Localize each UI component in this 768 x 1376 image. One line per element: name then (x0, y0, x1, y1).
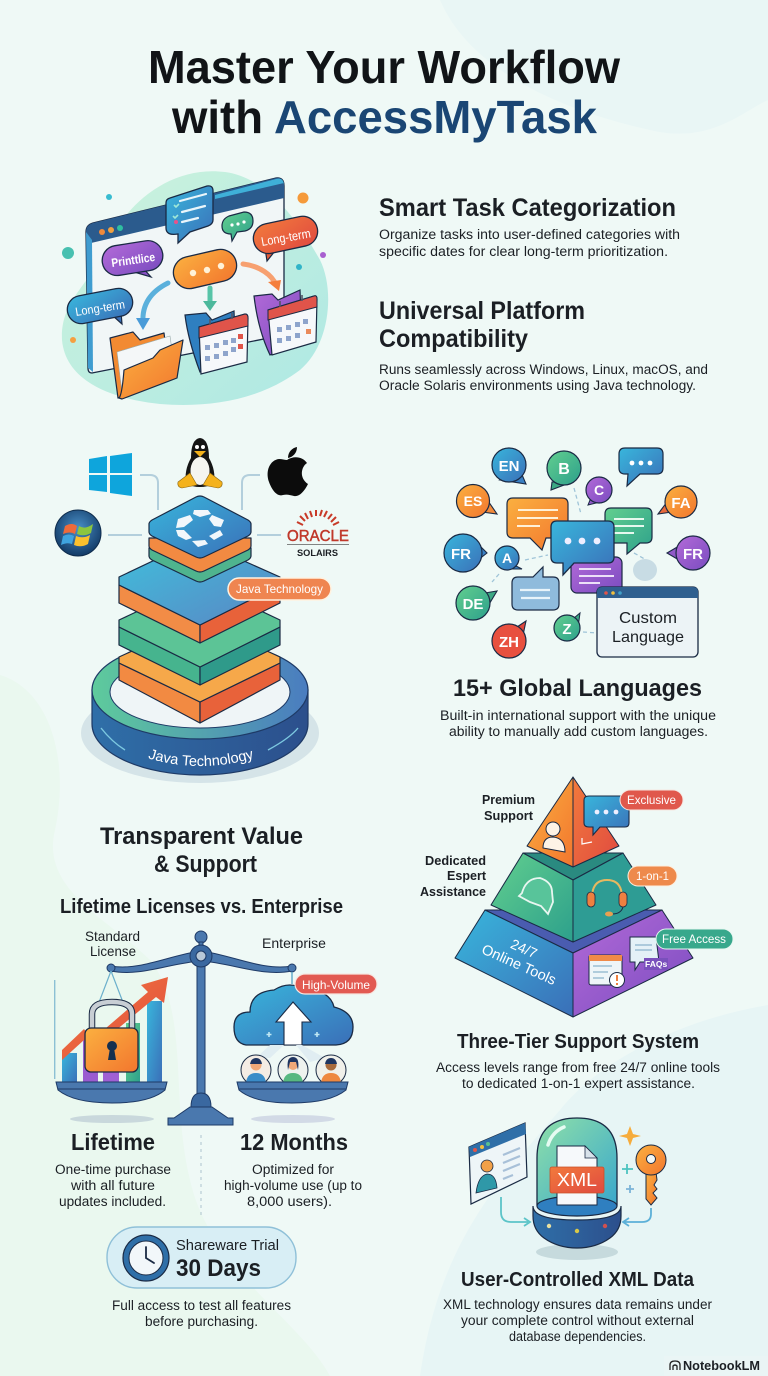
text: online tools: Online Tools (479, 942, 558, 989)
icon: apple (268, 447, 308, 496)
icon: check mark (582, 838, 592, 844)
bubble: ZH: ZH (499, 634, 519, 651)
text block: universal platform compatibility: Compatibility (379, 325, 528, 353)
window (86, 178, 284, 373)
bubble: long-term blue: Long-term (74, 297, 126, 319)
bubble: green (222, 212, 253, 241)
text block: universal platform compatibility: Runs seamlessly across Windows, Linux, macOS, and (379, 362, 708, 377)
title: with AccessMyTask (171, 91, 597, 143)
illustration: language bubbles (444, 448, 710, 658)
text block: smart task categorization: specific dates for clear long-term prioritization. (379, 244, 668, 259)
icon: calendar with blue folder (185, 311, 248, 374)
illustration: task categorization (62, 171, 328, 405)
pyramid middle tier (491, 853, 656, 942)
base platform: Java Technology (148, 749, 252, 766)
column: lifetime (55, 1129, 171, 1209)
pill: high-volume: High-Volume (302, 978, 370, 992)
scale labels (85, 928, 326, 959)
bubble: EN: EN (499, 458, 519, 475)
bubble: Z: Z (562, 621, 572, 638)
text block: user-controlled xml (443, 1269, 713, 1344)
label: dedicated expert assistance: Assistance (420, 884, 486, 899)
column: 12 months (224, 1129, 362, 1209)
pill: 1-on-1: 1-on-1 (636, 869, 669, 883)
window: custom language: Language (612, 629, 684, 646)
bubble: ZH (492, 621, 526, 658)
icon: faq note (630, 937, 668, 970)
icon: faq note: FAQs (645, 959, 667, 969)
pill: free access (656, 929, 733, 949)
illustration: support pyramid (420, 777, 733, 1017)
label: premium support: Support (484, 808, 534, 823)
bubble: long-term red: Long-term (260, 226, 312, 249)
heading: transparent value: Transparent Value (100, 823, 303, 850)
column: 12 months: 12 Months (240, 1129, 348, 1155)
scale labels: Enterprise (262, 935, 326, 951)
icon: windows orb (55, 510, 101, 556)
bubble: Z (554, 613, 580, 641)
text block: three-tier support: Three-Tier Support System (457, 1031, 699, 1053)
chat: green (605, 508, 652, 554)
text block: user-controlled xml: database dependencies. (509, 1329, 646, 1344)
connector arrows (501, 1164, 651, 1226)
bubble: printtlice: Printtlice (110, 250, 156, 270)
text block: three-tier support: to dedicated 1-on-1 expert assistance. (462, 1076, 695, 1091)
icon: chat outline (519, 878, 553, 914)
dome shadow (536, 1244, 618, 1260)
illustration: java platform stack (54, 438, 349, 783)
text block: smart task categorization: Organize tasks into user-defined categories with (379, 227, 680, 242)
text block: user-controlled xml: User-Controlled XML Data (461, 1269, 695, 1291)
bubble: C (586, 477, 612, 505)
bubble: FR purple (667, 536, 710, 570)
column: 12 months: high-volume use (up to (224, 1178, 362, 1193)
pill: shareware trial: Shareware Trial (176, 1238, 279, 1254)
pill: shareware trial: 30 Days (176, 1255, 261, 1282)
icon: help window (589, 955, 624, 988)
slab: green middle (119, 582, 280, 685)
text block: universal platform compatibility: Universal Platform (379, 297, 585, 325)
bubble: FR blue (444, 534, 487, 572)
pill: java technology (228, 578, 331, 600)
scale labels: Standard (85, 928, 140, 944)
column: lifetime: with all future (70, 1178, 155, 1193)
chat: light blue (512, 567, 559, 610)
bubble: orange dots (170, 246, 240, 292)
bubble: ES: ES (464, 493, 482, 509)
label: premium support: Premium (482, 792, 535, 807)
subheading: lifetime vs enterprise: Lifetime Licenses vs. Enterprise (60, 896, 343, 918)
icon: platform logo (176, 510, 224, 547)
icon: calendar with purple folder (254, 290, 317, 355)
icon: key (636, 1145, 666, 1205)
pyramid bottom tier (455, 910, 693, 1017)
title (148, 41, 620, 143)
text block: global languages (440, 675, 716, 739)
bubble: A (495, 546, 522, 570)
logo: oracle solaris: ORACLE (287, 528, 349, 545)
bubble: DE: DE (463, 596, 483, 613)
arrows (136, 264, 281, 330)
base platform (81, 652, 319, 783)
bubble: long-term red (251, 213, 320, 261)
pill: free access: Free Access (662, 932, 726, 946)
icon: windows logo (89, 453, 132, 496)
pill: java technology: Java Technology (236, 582, 323, 596)
column: lifetime: Lifetime (71, 1129, 155, 1155)
text block: global languages: ability to manually add custom languages. (449, 724, 708, 739)
text: online tools: 24/7 (508, 936, 540, 961)
window: custom language: Custom (619, 610, 677, 627)
icon: xml file (550, 1146, 604, 1205)
dome base (533, 1196, 621, 1248)
chat: main blue (551, 521, 614, 575)
right pan: enterprise cloud (234, 972, 353, 1103)
text block: universal platform compatibility (379, 297, 708, 393)
text block: user-controlled xml: your complete control without external (461, 1313, 694, 1328)
title: Master Your Workflow (148, 41, 620, 93)
badge: notebooklm: NotebookLM (683, 1359, 760, 1373)
left pan: lifetime license (54, 971, 168, 1103)
column: 12 months: Optimized for (252, 1162, 335, 1177)
pill: exclusive: Exclusive (627, 793, 676, 807)
window: custom language (597, 587, 698, 657)
text block: trial note: Full access to test all features (112, 1298, 291, 1313)
icon: headset (587, 880, 627, 916)
decorative dots (62, 192, 326, 343)
bubble: checklist (166, 186, 213, 243)
bubble: FR purple: FR (683, 546, 703, 563)
slab: blue upper (119, 540, 280, 643)
icon: folder (110, 332, 183, 399)
window: user profile (469, 1123, 527, 1204)
bubble: EN (492, 448, 526, 484)
heading: transparent value (100, 823, 303, 878)
chat: purple (571, 557, 622, 593)
icon: clock (123, 1235, 169, 1281)
divider (200, 1135, 202, 1215)
bubble: B (547, 451, 581, 490)
slab: orange lower (119, 620, 280, 723)
bubble: FA: FA (671, 495, 691, 512)
text block: smart task categorization (379, 194, 680, 259)
text block: trial note (112, 1298, 291, 1329)
icon: linux penguin (178, 438, 222, 488)
logo: oracle solaris (287, 510, 349, 558)
bubble: B: B (558, 461, 570, 478)
chat: orange (507, 498, 568, 550)
text block: global languages: Built-in international support with the unique (440, 708, 716, 723)
slab: top server tile (149, 496, 251, 582)
icon: chat bubble (584, 796, 629, 835)
pill: high-volume (295, 974, 377, 994)
text block: smart task categorization: Smart Task Categorization (379, 194, 676, 222)
bubble: FA (658, 486, 697, 518)
text block: user-controlled xml: XML technology ensures data remains under (443, 1297, 713, 1312)
pill: 1-on-1 (628, 866, 677, 886)
connector lines (108, 475, 281, 535)
text block: three-tier support (436, 1031, 720, 1091)
label: dedicated expert assistance: Dedicated (425, 853, 486, 868)
column: lifetime: One-time purchase (55, 1162, 171, 1177)
pill: exclusive (620, 790, 683, 810)
scale shadows (70, 1115, 335, 1123)
logo: oracle solaris: SOLAIRS (297, 548, 338, 558)
icon: xml file: XML (557, 1170, 597, 1190)
illustration: xml dome (469, 1118, 666, 1260)
label: dedicated expert assistance: Espert (447, 868, 487, 883)
glass dome (537, 1118, 617, 1205)
shape: pale bubble (633, 559, 657, 581)
dashed links (492, 488, 650, 633)
scale post and beam (107, 931, 296, 1125)
label: premium support (482, 792, 535, 823)
bubble: long-term blue (65, 286, 135, 326)
column: 12 months: 8,000 users). (247, 1194, 332, 1209)
scale labels: License (90, 943, 136, 959)
bubble: A: A (502, 550, 512, 566)
badge: notebooklm (664, 1356, 768, 1376)
column: lifetime: updates included. (59, 1194, 166, 1209)
illustration: balance scale (54, 928, 377, 1125)
bubble: printtlice (100, 238, 165, 278)
text block: universal platform compatibility: Oracle Solaris environments using Java technology. (379, 378, 696, 393)
bubble: FR blue: FR (451, 546, 471, 563)
bubble: ES (456, 484, 497, 518)
heading: transparent value: & Support (154, 851, 257, 878)
pill: shareware trial (107, 1227, 296, 1288)
bubble: DE (456, 586, 497, 620)
bubble: C: C (594, 482, 604, 498)
label: dedicated expert assistance (420, 853, 487, 899)
bubble: top-right chat (619, 448, 663, 486)
pyramid top tier (527, 777, 619, 867)
text block: three-tier support: Access levels range from free 24/7 online tools (436, 1060, 720, 1075)
icon: sparkle (619, 1126, 641, 1146)
icon: person (543, 822, 565, 852)
text block: global languages: 15+ Global Languages (453, 675, 702, 702)
text block: trial note: before purchasing. (145, 1314, 258, 1329)
